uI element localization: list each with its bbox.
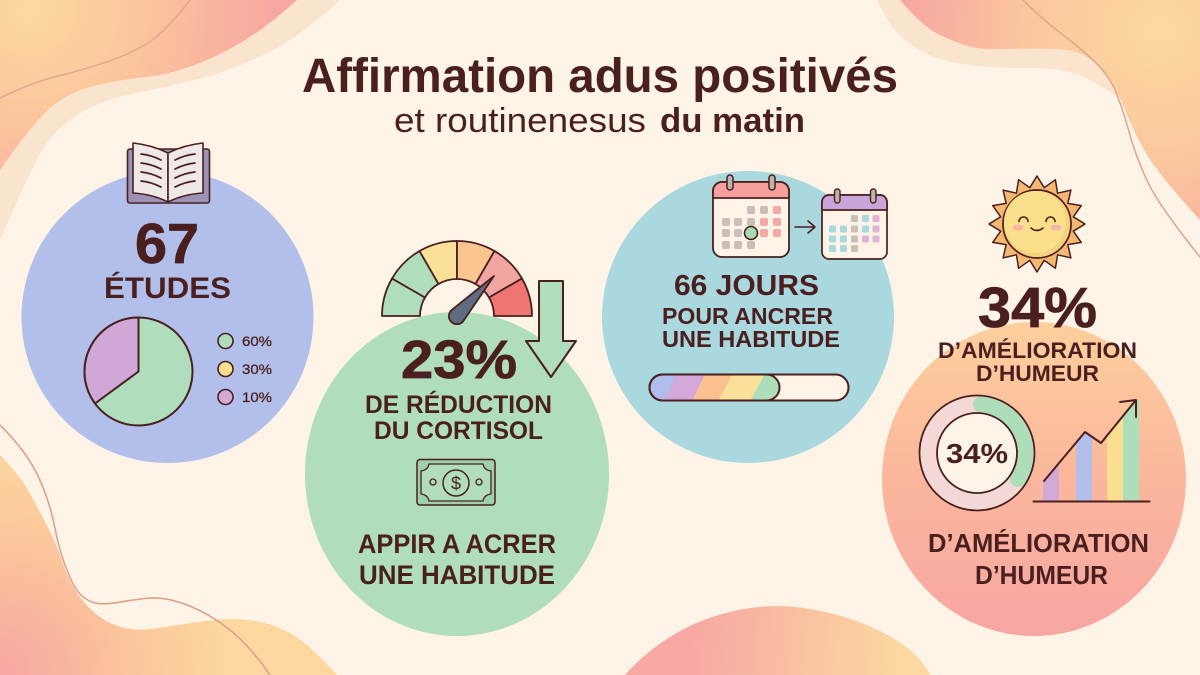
panel: 34% humeur: [882, 176, 1186, 636]
icon: open book: [128, 143, 210, 203]
bar chart with rising arrow: [1034, 400, 1150, 502]
legend: [218, 333, 272, 405]
icon: second calendar: [822, 189, 887, 259]
icon: smiling sun: [989, 176, 1085, 272]
label: d'amélioration d'humeur: [938, 338, 1137, 386]
label: études: ÉTUDES: [104, 271, 231, 305]
subtitle: [394, 102, 805, 140]
label: de réduction du cortisol: [365, 390, 552, 445]
stat: 34%: 34%: [978, 276, 1097, 340]
arrow: downward: [526, 281, 576, 377]
title: [302, 50, 898, 140]
label: appir a acrer une habitude: APPIR A ACRER: [358, 529, 556, 559]
decorative blob: bottom left: [0, 425, 337, 675]
label: d'amélioration d'humeur: D’HUMEUR: [976, 361, 1099, 386]
panel: 67 études: [22, 143, 314, 463]
subtitle: et routinenesus: [394, 102, 646, 140]
stat: 23%: 23%: [401, 330, 517, 390]
pie chart: [84, 318, 192, 426]
progress bar: [648, 374, 850, 402]
label: d'amélioration d'humeur: D’AMÉLIORATION: [938, 338, 1137, 363]
legend: 60%: [242, 333, 272, 349]
decorative blob: top left: [0, 0, 340, 240]
stat: 66 jours: 66 JOURS: [674, 270, 819, 302]
label: appir a acrer une habitude: [358, 529, 556, 590]
icon: banknote: $: [451, 474, 461, 494]
donut chart: 34%: [946, 438, 1008, 469]
panel: 66 jours: [602, 171, 894, 463]
subtitle: du matin: [660, 102, 805, 140]
donut chart: [920, 396, 1034, 510]
label: d'amélioration d'humeur, repeated: [928, 528, 1149, 590]
label: pour ancrer une habitude: [662, 303, 840, 352]
icon: banknote: [417, 460, 495, 505]
legend: 10%: [242, 389, 272, 405]
label: d'amélioration d'humeur, repeated: D’HUMEUR: [975, 560, 1108, 590]
arrow between calendars: [795, 221, 815, 233]
icon: calendar with marked day: [713, 175, 789, 257]
gauge: [382, 241, 532, 324]
panel: 23% cortisol: [305, 241, 609, 636]
label: de réduction du cortisol: DU CORTISOL: [374, 417, 543, 445]
label: pour ancrer une habitude: POUR ANCRER: [662, 303, 833, 329]
decorative blob: bottom centre: [625, 606, 930, 675]
label: de réduction du cortisol: DE RÉDUCTION: [365, 390, 552, 419]
label: d'amélioration d'humeur, repeated: D’AMÉLIORATION: [928, 528, 1149, 558]
legend: 30%: [242, 361, 272, 377]
label: appir a acrer une habitude: UNE HABITUDE: [359, 560, 555, 590]
title: Affirmation adus positivés: [302, 50, 898, 103]
gauge needle: [449, 276, 494, 324]
stat: 67: 67: [135, 212, 199, 276]
decorative blob: top right: [877, 0, 1200, 257]
label: pour ancrer une habitude: UNE HABITUDE: [662, 326, 840, 352]
